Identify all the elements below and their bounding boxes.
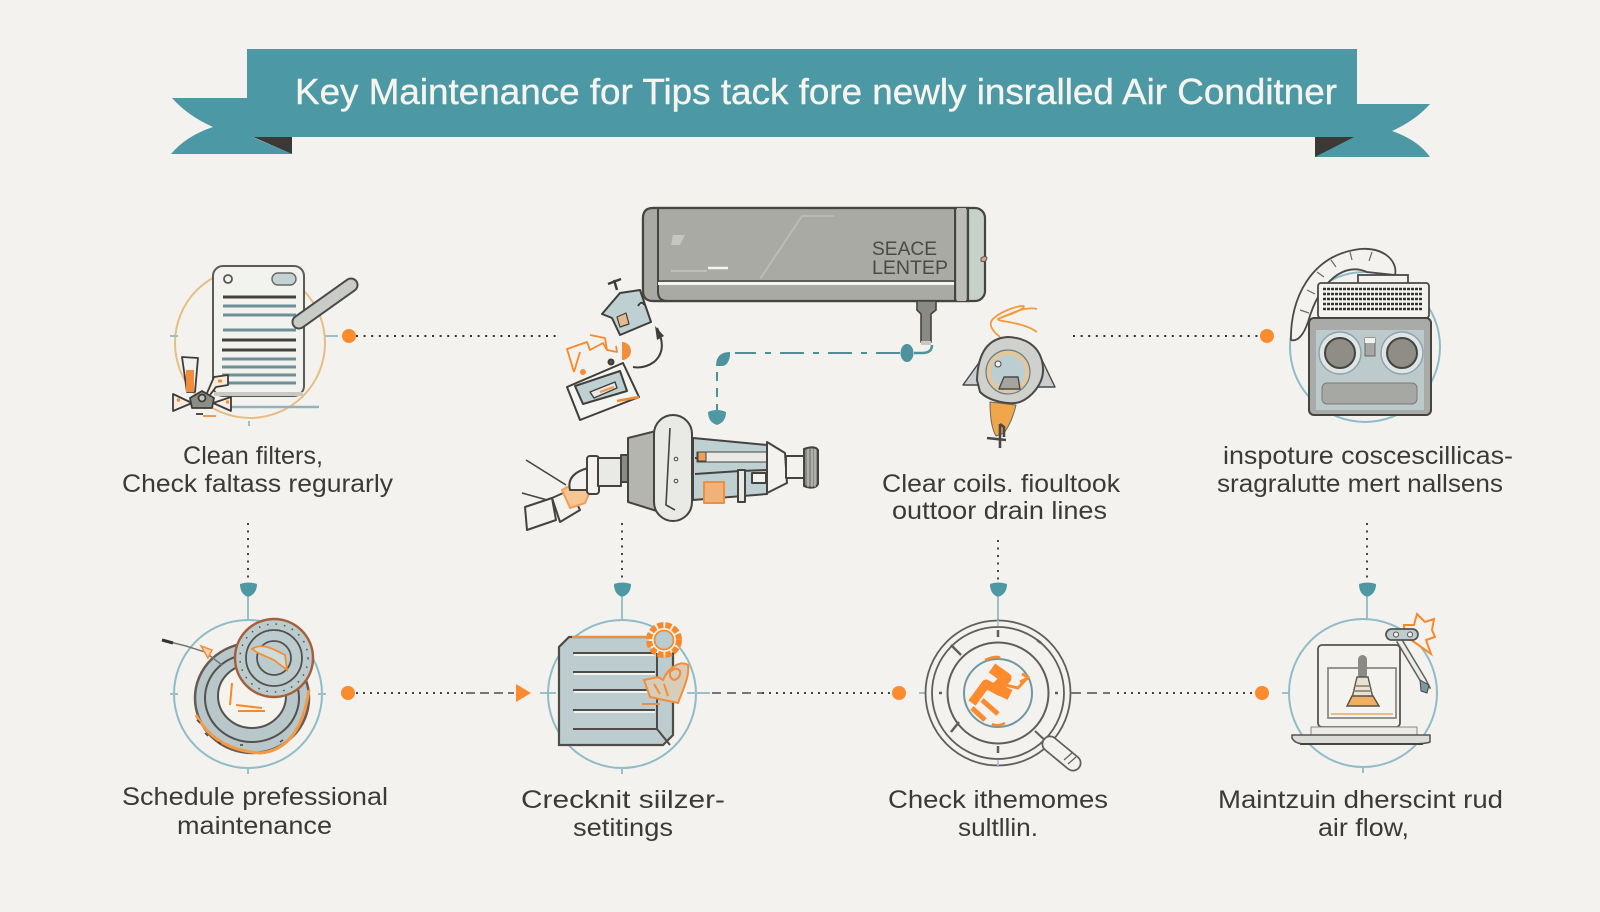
icon: laptop airflow (1289, 614, 1437, 773)
connector: magnifier to laptop (1071, 686, 1289, 700)
connector: filter to AC (342, 329, 560, 343)
label: maintain airflow: Maintzuin dherscint rud (1218, 786, 1503, 814)
icon: air conditioner indoor unit (643, 208, 987, 345)
label: clear coils (882, 470, 1121, 525)
label: schedule maintenance: maintenance (177, 812, 332, 840)
label: clear coils: Clear coils. fioultook (882, 470, 1121, 498)
AC unit brand text: SEACE (872, 239, 937, 260)
icon: fan clip tool (173, 357, 231, 416)
icon: coil cleaner rocket (963, 306, 1055, 448)
icon: orange rocket (642, 663, 688, 704)
icon: magnifier thermostat (926, 620, 1076, 766)
label: maintain airflow (1218, 786, 1503, 842)
label: schedule maintenance: Schedule prefessional (122, 783, 388, 811)
label: check settings (521, 786, 725, 842)
label: check thermostat: Check ithemomes (888, 786, 1108, 814)
label: schedule maintenance (122, 783, 388, 840)
label: inspect: sragralutte mert nallsens (1217, 470, 1503, 498)
icon: vent settings (548, 620, 696, 774)
icon: orange gear (649, 625, 679, 655)
icon: air conditioner indoor unit: LENTEP (872, 258, 948, 279)
connector: vent to magnifier (687, 686, 925, 700)
connector: indoor unit to outdoor (1073, 329, 1274, 343)
title banner (171, 49, 1430, 157)
icon: wrench with spark (1386, 614, 1435, 693)
label: inspect: inspoture coscescillicas- (1223, 442, 1513, 470)
connector: disc to vent (341, 684, 556, 702)
icon: small parts (house, circuit, tray) (567, 279, 664, 420)
label: clean filters: Check faltass regurarly (122, 470, 394, 498)
label: clear coils: outtoor drain lines (892, 497, 1107, 525)
icon: air filter (170, 266, 351, 426)
label: maintain airflow: air flow, (1318, 814, 1409, 842)
title text: Key Maintenance for Tips tack fore newly insralled Air Conditner (295, 71, 1337, 112)
label: inspect (1217, 442, 1513, 498)
icon: pipe device with hand (522, 415, 818, 530)
icon: outdoor unit (1290, 249, 1440, 422)
vertical connectors to lower row (240, 523, 1376, 620)
label: check settings: Crecknit siilzer- (521, 786, 725, 814)
icon: orange wrench (972, 657, 1028, 725)
label: check thermostat: sultllin. (958, 814, 1038, 842)
label: check thermostat (888, 786, 1108, 842)
label: check settings: setitings (573, 814, 673, 842)
connector: drain hose (708, 344, 932, 425)
label: clean filters: Clean filters, (183, 442, 323, 470)
icon: disc professional maintenance (162, 619, 326, 774)
label: clean filters (122, 442, 394, 498)
